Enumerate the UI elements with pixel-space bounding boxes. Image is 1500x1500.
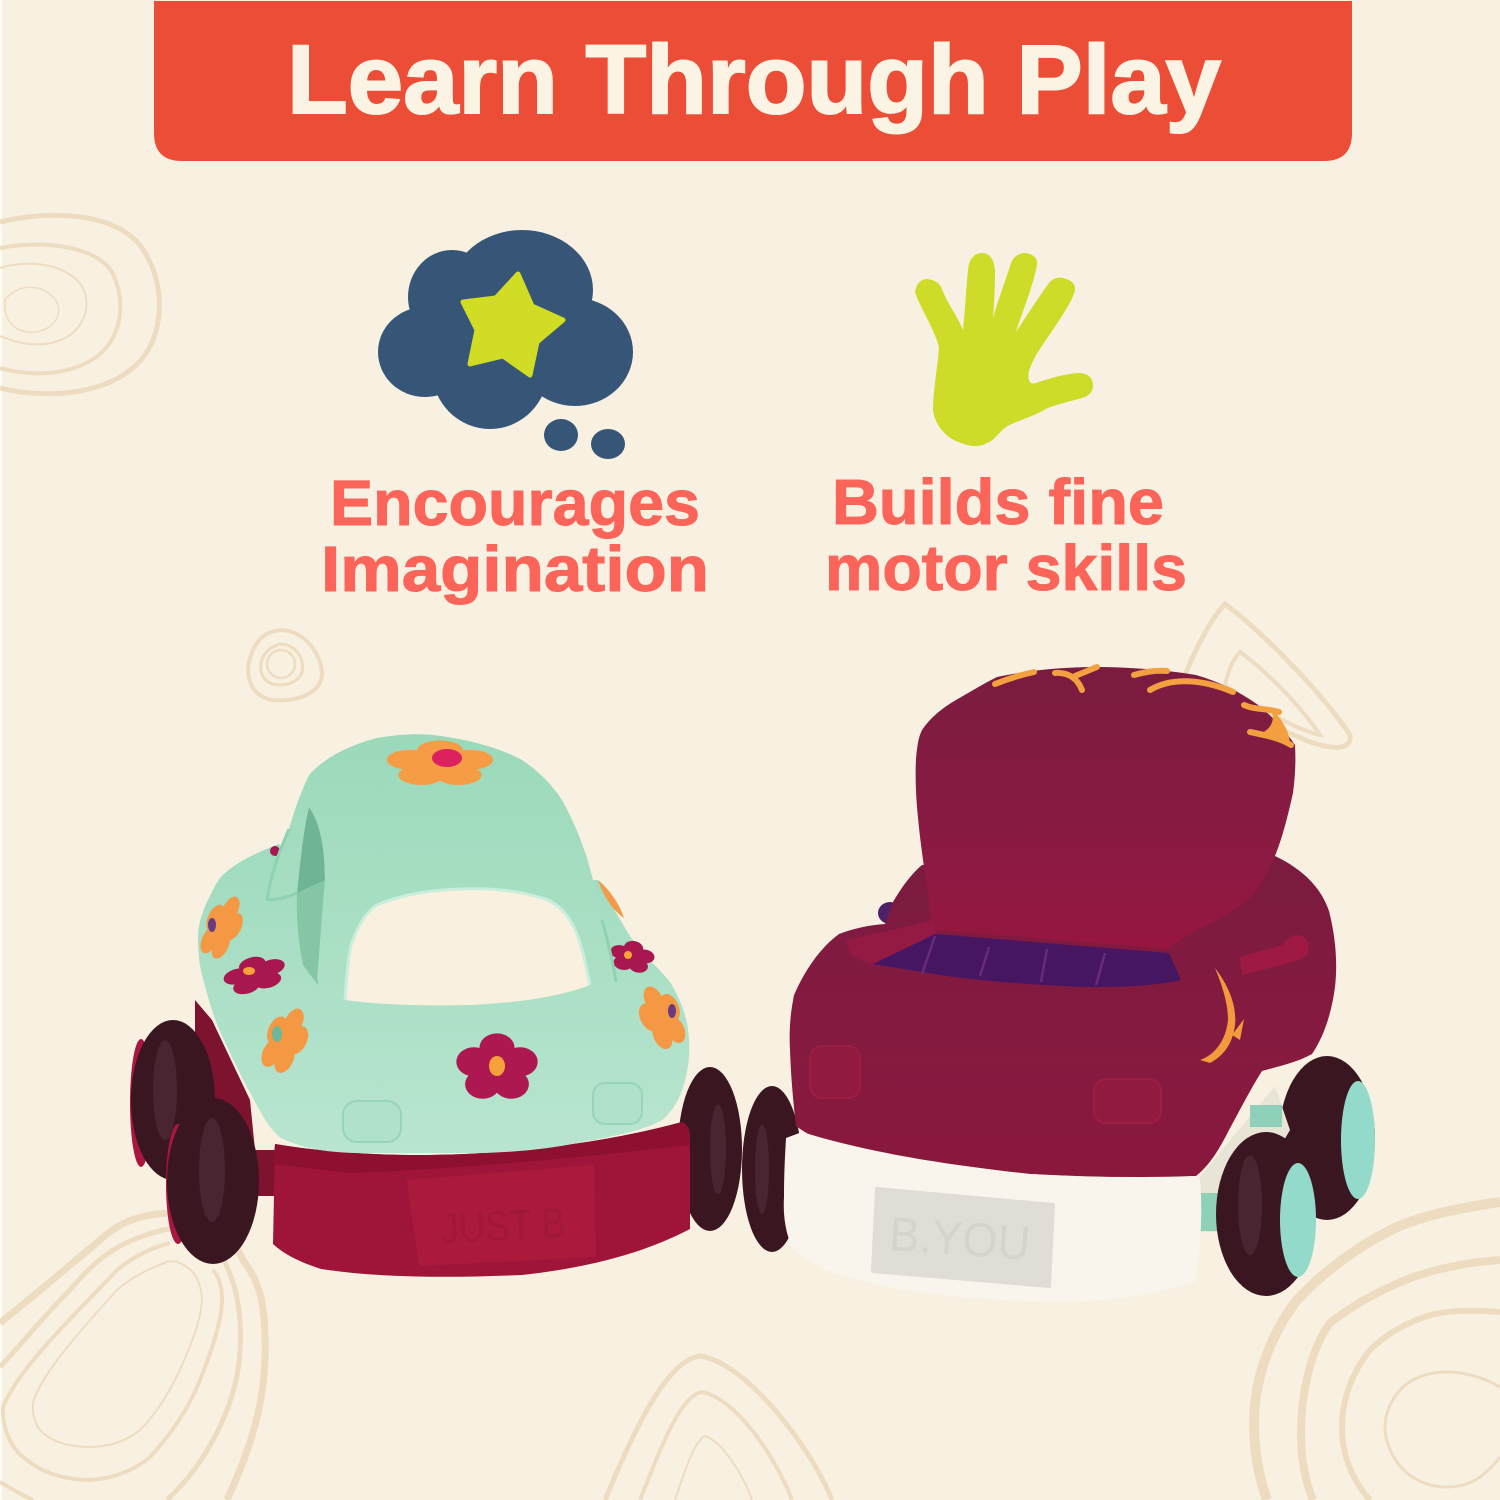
- left wheel: [742, 1086, 802, 1252]
- text: builds fine motor skills: [825, 466, 1187, 604]
- bumper plate: B.YOU: [888, 1208, 1032, 1271]
- bumper plate: JUST B: [439, 1199, 567, 1252]
- rear wheel: [1279, 1056, 1375, 1220]
- side flowers: [598, 880, 624, 918]
- body: [198, 844, 689, 1153]
- chassis strut: [195, 1000, 275, 1196]
- title: Learn Through Play: [287, 25, 1221, 134]
- side window opening: [297, 807, 325, 893]
- toy car: maroon: [742, 667, 1375, 1302]
- bumper plate: [409, 1167, 594, 1264]
- tub rim: [846, 920, 936, 964]
- chassis: [1190, 1086, 1290, 1232]
- door handle: [1240, 935, 1309, 975]
- canopy: [267, 734, 616, 1000]
- lights: [343, 1101, 401, 1142]
- right wheel: [678, 1067, 742, 1231]
- front flower: [456, 1033, 538, 1099]
- text: builds fine motor skills: Builds fine: [832, 466, 1164, 538]
- purple seat well: [873, 934, 1181, 987]
- windscreen: [345, 889, 590, 1005]
- shaded gap behind canopy: [297, 880, 325, 985]
- text: encourages imagination: [321, 467, 709, 605]
- roof orange detail: [995, 667, 1291, 745]
- moon detail: [1200, 968, 1244, 1063]
- canopy edge shading: [267, 829, 616, 982]
- icon: thought cloud with star: [378, 230, 633, 459]
- text: builds fine motor skills: motor skills: [825, 532, 1187, 604]
- icon: hand print: [915, 253, 1093, 446]
- front wheel: [1216, 1132, 1316, 1296]
- bumper: white: [784, 1132, 1201, 1302]
- rear wheel: [130, 1020, 215, 1180]
- front wheel: [166, 1098, 259, 1264]
- toy car: mint: [130, 734, 742, 1277]
- title banner: [154, 1, 1352, 161]
- windscreen highlight: [345, 889, 590, 1000]
- roof flower: [387, 740, 493, 785]
- lights: [810, 1046, 860, 1098]
- body: [790, 856, 1336, 1177]
- text: encourages imagination: Encourages: [330, 467, 700, 539]
- bumper: maroon: [273, 1122, 690, 1277]
- bumper plate: [873, 1189, 1053, 1286]
- text: encourages imagination: Imagination: [321, 533, 709, 605]
- purple knob: [878, 902, 902, 924]
- cab: [916, 667, 1295, 949]
